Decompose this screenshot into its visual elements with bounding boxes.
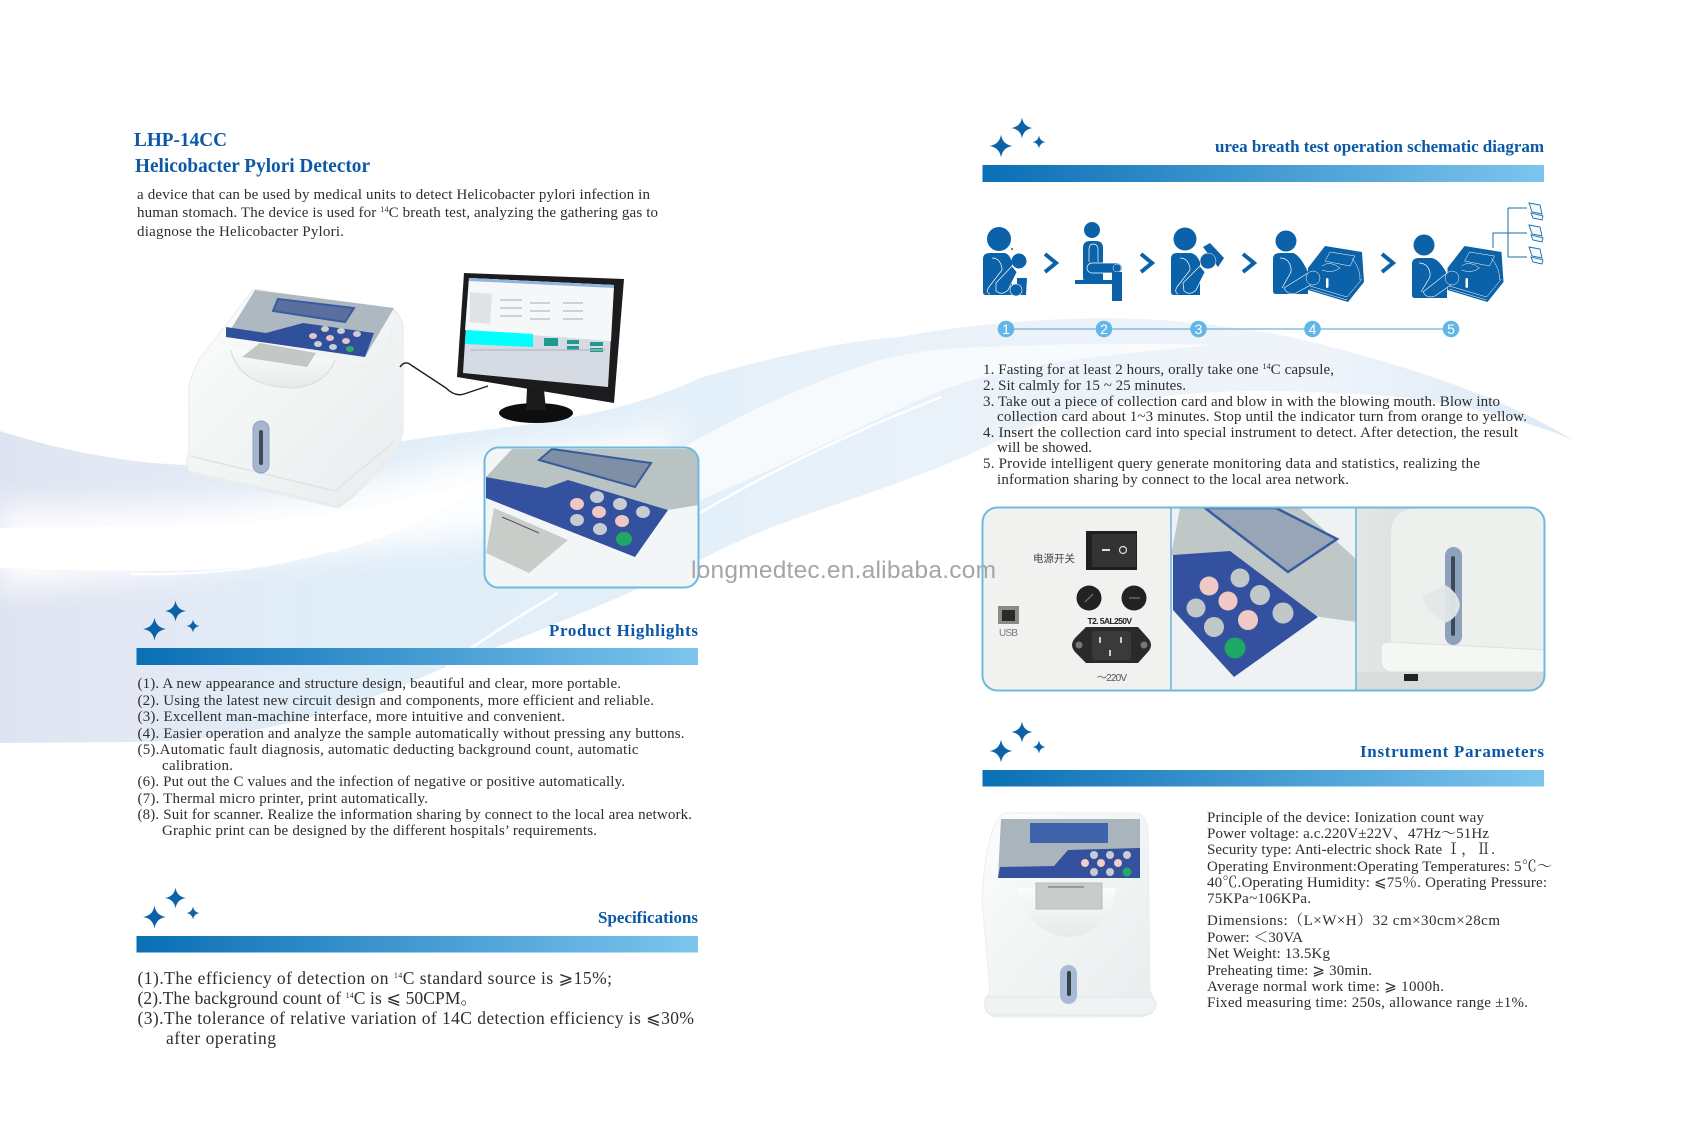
step number timeline: 2 [1100, 321, 1108, 337]
monitor [457, 273, 624, 423]
product photo: analyzer device [187, 289, 403, 508]
text: instrument parameters: Net Weight: 13.5Kg [1207, 946, 1330, 962]
text: operation steps [983, 362, 1527, 488]
intro paragraph: C breath test, analyzing the gathering gas to [389, 205, 658, 221]
arrow [1382, 254, 1393, 272]
step number timeline [998, 321, 1459, 337]
intro paragraph: human stomach. The device is used for [137, 205, 376, 221]
title: LHP-14CC [134, 129, 227, 151]
text: operation steps: 2. Sit calmly for 15 ~ 25 minutes. [983, 378, 1186, 394]
heading: urea breath test diagram: urea breath test operation schematic diagram [1215, 137, 1544, 156]
text: specifications list: after operating [166, 1028, 276, 1048]
sub-panel: card slot close-up [1356, 508, 1546, 691]
text: product highlights list: (7). Thermal micro printer, print automatically. [138, 791, 428, 807]
sub-panel: power connectors [998, 531, 1151, 684]
intro paragraph: a device that can be used by medical units to detect Helicobacter pylori infection in [137, 187, 650, 203]
text: instrument parameters: Dimensions:（L×W×H）32 cm×30cm×28cm [1207, 912, 1500, 929]
arrow [1243, 254, 1254, 272]
text: product highlights list: calibration. [162, 758, 233, 774]
title [134, 129, 370, 177]
text: specifications list: C standard source is ⩾15%; [403, 968, 612, 988]
text: operation steps: 4. Insert the collection card into special instrument to detect. After detection, the result [983, 425, 1519, 441]
cable [400, 363, 488, 395]
watermark: longmedtec.en.alibaba.com [691, 557, 996, 584]
heading: urea breath test diagram [982, 118, 1544, 182]
text: product highlights list: Graphic print can be designed by the different hospitals’ requirements. [162, 823, 597, 839]
heading: specifications: Specifications [598, 908, 698, 927]
icon: step 2 seated person [1075, 222, 1122, 301]
inset: control panel close-up [484, 447, 700, 589]
intro paragraph: diagnose the Helicobacter Pylori. [137, 224, 344, 240]
sub-panel: keypad close-up [1171, 508, 1357, 677]
heading: specifications [136, 888, 698, 952]
text: instrument parameters: Operating Environment:Operating Temperatures: 5℃～ [1207, 859, 1552, 875]
text: product highlights list: (5).Automatic fault diagnosis, automatic deducting background count, automatic [138, 742, 639, 758]
intro paragraph: 14 [380, 205, 388, 214]
text: specifications list: (3).The tolerance of relative variation of 14C detection efficiency is ⩽30% [138, 1008, 694, 1028]
text: instrument parameters: 40℃.Operating Humidity: ⩽75％. Operating Pressure: [1207, 875, 1547, 891]
text: product highlights list: (4). Easier operation and analyze the sample automatically without pressing any buttons. [138, 726, 684, 742]
heading: product highlights: Product Highlights [549, 621, 698, 640]
arrow [1141, 254, 1152, 272]
background waves [0, 318, 1573, 743]
panel: instrument detail photos [982, 507, 1546, 691]
text: operation steps: 1. Fasting for at least 2 hours, orally take one [983, 362, 1259, 378]
text: operation steps: will be showed. [997, 440, 1092, 456]
product photo: instrument front view [982, 813, 1156, 1017]
text: operation steps: C capsule, [1271, 362, 1334, 378]
arrow [1045, 254, 1056, 272]
text: operation steps: 5. Provide intelligent query generate monitoring data and statistics, realizing the [983, 456, 1480, 472]
text: product highlights list: (2). Using the latest new circuit design and components, more efficient and reliable. [138, 693, 654, 709]
text: specifications list [138, 968, 694, 1048]
heading: instrument parameters: Instrument Parameters [1360, 742, 1544, 761]
sub-panel: power connectors: 电源开关 [1033, 552, 1076, 565]
heading: instrument parameters [982, 722, 1544, 786]
text: instrument parameters: Power voltage: a.c.220V±22V、47Hz～51Hz [1207, 826, 1489, 842]
text: specifications list: (1).The efficiency of detection on [138, 968, 388, 988]
sub-panel: power connectors: USB [999, 628, 1018, 639]
text: product highlights list [138, 676, 692, 839]
step number timeline: 1 [1002, 321, 1010, 337]
text: instrument parameters: Preheating time: ⩾ 30min. [1207, 963, 1372, 979]
text: product highlights list: (8). Suit for scanner. Realize the information sharing by connect to the local area network. [138, 807, 692, 823]
text: product highlights list: (1). A new appearance and structure design, beautiful and clear, more portable. [138, 676, 621, 692]
text: instrument parameters: 75KPa~106KPa. [1207, 891, 1311, 907]
step number timeline: 3 [1195, 321, 1203, 337]
text: product highlights list: (3). Excellent man-machine interface, more intuitive and convenient. [138, 709, 565, 725]
text: specifications list: (2).The background count of [138, 988, 341, 1008]
title: Helicobacter Pylori Detector [135, 155, 370, 177]
text: instrument parameters: Security type: Anti-electric shock Rate Ⅰ，Ⅱ. [1207, 842, 1495, 858]
text: instrument parameters: Average normal work time: ⩾ 1000h. [1207, 979, 1444, 995]
sub-panel: power connectors: T2. 5AL250V [1088, 616, 1132, 626]
text: specifications list: 14 [394, 971, 402, 980]
text: specifications list: 14 [346, 991, 354, 1000]
text: instrument parameters: Fixed measuring time: 250s, allowance range ±1%. [1207, 995, 1528, 1011]
step number timeline: 4 [1309, 321, 1317, 337]
step number timeline: 5 [1447, 321, 1455, 337]
icon: step 5 person with networked instrument [1412, 203, 1543, 302]
text: operation steps: 14 [1262, 362, 1271, 371]
text: instrument parameters [1207, 810, 1552, 1011]
text: operation steps: 3. Take out a piece of collection card and blow in with the blowing mouth. Blow into [983, 394, 1500, 410]
text: instrument parameters: Principle of the device: Ionization count way [1207, 810, 1484, 826]
icon: step 1 person taking capsule [983, 227, 1027, 296]
icon: step 4 person with instrument [1273, 230, 1364, 302]
text: operation steps: information sharing by connect to the local area network. [997, 472, 1349, 488]
text: specifications list: C is ⩽ 50CPM。 [354, 988, 478, 1008]
sub-panel: power connectors: ～220V [1097, 673, 1127, 684]
text: operation steps: collection card about 1~3 minutes. Stop until the indicator turn from orange to yellow. [997, 409, 1527, 425]
intro paragraph [137, 187, 658, 240]
icon: step 3 person blowing card [1171, 228, 1224, 295]
text: product highlights list: (6). Put out the C values and the infection of negative or positive automatically. [138, 774, 625, 790]
heading: product highlights [136, 600, 698, 665]
text: instrument parameters: Power: ＜30VA [1207, 930, 1303, 946]
